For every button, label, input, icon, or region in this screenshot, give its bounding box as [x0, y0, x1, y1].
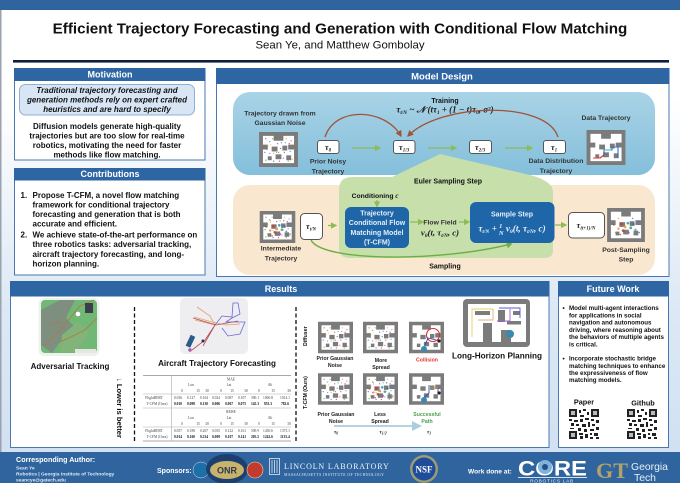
node tau t+1: τ — [577, 220, 580, 230]
corresponding author — [16, 455, 115, 483]
t-cfm model box: (T-CFM) — [364, 240, 390, 246]
sponsors label: Sponsors: — [157, 468, 192, 475]
logo: lincoln laboratory: LINCOLN LABORATORY — [284, 462, 390, 471]
logo: onr: ONR — [217, 466, 238, 476]
diffuser step 1 — [318, 322, 353, 353]
node tau 2/3: 2/3 — [478, 148, 486, 154]
contributions list: aircraft trajectory forecasting, and long- — [32, 250, 184, 259]
flow field label: t/N — [441, 233, 448, 239]
post-sampling label — [602, 247, 650, 264]
motivation callout: heuristics and are hard to specify — [43, 105, 171, 114]
tau labels — [334, 430, 431, 436]
data trajectory image — [587, 130, 625, 165]
results table — [143, 376, 291, 441]
label prior gaussian noise: Prior Gaussian — [317, 356, 353, 362]
results table: 0.127 — [187, 396, 195, 400]
contributions heading — [14, 168, 206, 180]
results table: 0.035 — [212, 429, 220, 433]
sample step box: t/N — [482, 229, 490, 235]
tau labels: 0 — [336, 432, 338, 436]
label more spread — [372, 358, 390, 371]
motivation body text — [29, 122, 185, 160]
results table: 0.160 — [187, 435, 195, 439]
results table: 0.036 — [174, 396, 182, 400]
future work bullets: Incorporate stochastic bridge — [569, 356, 657, 362]
results table: 0.067 — [225, 402, 233, 406]
panel: contributions — [14, 168, 206, 275]
future work bullets: for applications in social — [569, 312, 642, 320]
node tau 2/3: τ — [475, 142, 479, 152]
model design heading — [216, 68, 670, 84]
results table: 15 — [196, 422, 200, 426]
contributions list: three robotics tasks: adversarial tracking, — [32, 240, 191, 249]
contributions list: 1. — [20, 191, 27, 200]
tau labels: 1 — [429, 432, 431, 436]
results table: T-CFM (Ours) — [147, 402, 168, 406]
motivation heading — [14, 68, 206, 81]
sample step box: t/N — [527, 229, 535, 235]
node tau t/N: t/N — [310, 228, 316, 232]
sampling region — [233, 185, 655, 275]
t-cfm model box: Matching Model — [351, 230, 403, 237]
sample step box: N — [498, 230, 504, 237]
tau labels: τ — [427, 430, 429, 436]
label prior gaussian noise row 2: Noise — [329, 419, 343, 425]
training label — [396, 98, 494, 116]
label successful path: Successful — [413, 412, 441, 418]
future work bullets: driving, where reasoning about — [569, 327, 661, 334]
label less spread: Less — [374, 412, 386, 418]
data distribution label: Data Distribution — [529, 158, 583, 165]
training label: 2 — [487, 106, 491, 112]
flow field label: Flow Field — [423, 220, 457, 226]
node tau t+1 — [568, 212, 604, 238]
label successful path — [413, 412, 441, 425]
gaussian noise label — [244, 110, 316, 127]
results table: Lon — [188, 383, 194, 387]
results table: 30 — [287, 389, 291, 393]
training label: + (1 − t)τ — [440, 104, 477, 114]
results table: 0.075 — [238, 402, 246, 406]
conditioning label: Conditioning c — [352, 193, 398, 200]
results table: 0.161 — [238, 429, 246, 433]
results table: 1135.4 — [280, 435, 290, 439]
label less spread — [371, 412, 389, 425]
sample step box: 1 — [499, 223, 502, 230]
euler sampling step region — [339, 154, 553, 258]
node tau 2/3 — [470, 140, 492, 154]
results table: 30 — [244, 389, 248, 393]
qr code github — [627, 409, 657, 439]
euler sampling step label: Euler Sampling Step — [414, 178, 482, 186]
logo: nsf: NSF — [415, 464, 433, 474]
future work heading: Future Work — [587, 284, 640, 294]
results table: 0 — [258, 389, 260, 393]
results table: T-CFM (Ours) — [147, 435, 168, 439]
sample step box — [470, 202, 554, 243]
future work bullets: the behaviors of multiple agents — [569, 334, 664, 341]
results table: 0.098 — [187, 402, 195, 406]
results table: Alt — [268, 383, 272, 387]
label collision: Collision — [416, 358, 438, 364]
results table: Lat — [227, 383, 231, 387]
results table: 0.141 — [238, 435, 246, 439]
logo: georgia tech — [596, 458, 668, 483]
results table: 1430.6 — [263, 429, 273, 433]
results table: 0.006 — [212, 402, 220, 406]
contributions list: framework for conditional trajectory — [32, 200, 170, 210]
intermediate label: Intermediate — [261, 246, 301, 252]
sampling label: Sampling — [429, 264, 461, 270]
results table: 0.010 — [174, 402, 182, 406]
node tau t+1: (t+1)/N — [580, 226, 596, 232]
model design heading: Model Design — [411, 72, 473, 82]
node tau 0: 0 — [329, 148, 332, 154]
results table: 15 — [230, 389, 234, 393]
tau labels: τ — [334, 430, 336, 436]
node tau t/N — [300, 214, 322, 240]
results table: 853.3 — [264, 402, 272, 406]
motivation callout: Traditional trajectory forecasting and — [36, 86, 179, 95]
logo: lincoln laboratory — [270, 458, 390, 477]
tau labels: τ — [379, 430, 382, 436]
results table: 15 — [271, 422, 275, 426]
flow field label: θ — [425, 233, 428, 239]
brown arrows — [325, 110, 558, 137]
motivation body text: robotics, motivating the need for faster — [33, 141, 181, 150]
prior noisy label: Trajectory — [312, 168, 344, 176]
t-cfm step 2 — [363, 373, 398, 405]
flow field label: v — [421, 228, 425, 238]
logo: nsf — [410, 455, 438, 483]
logo: georgia tech: GT — [596, 458, 628, 483]
contributions list: Propose T-CFM, a novel flow matching — [32, 191, 179, 200]
post-sampling label: Step — [619, 256, 633, 264]
future work heading — [558, 281, 669, 296]
results table: 0.267 — [200, 429, 208, 433]
results table: 0.057 — [174, 429, 182, 433]
results table: 15 — [271, 389, 275, 393]
footer — [0, 452, 680, 483]
contributions heading: Contributions — [80, 169, 140, 179]
results table: 30 — [244, 422, 248, 426]
flow field label — [421, 220, 459, 239]
contributions list — [20, 191, 197, 268]
results table: 0.014 — [174, 435, 182, 439]
sample step box: (t, τ — [513, 224, 528, 234]
intermediate label: Trajectory — [265, 256, 297, 262]
row label t-cfm: T-CFM (Ours) — [303, 376, 309, 409]
sample step box: + — [489, 224, 499, 234]
adversarial tracking map — [38, 298, 100, 356]
logo: georgia tech: Georgia — [631, 462, 668, 473]
results table: 0 — [220, 389, 222, 393]
title: Efficient Trajectory Forecasting and Generation with Conditional Flow Matching — [53, 20, 627, 38]
results table: 0.024 — [212, 396, 220, 400]
results table: FlightBERT — [145, 429, 164, 433]
lower is better label: ↓ Lower is better — [115, 378, 124, 438]
tau labels: 1/2 — [382, 432, 387, 436]
long-horizon planning maze — [463, 299, 530, 347]
future work bullets — [562, 305, 666, 384]
results table: 30 — [205, 389, 209, 393]
results table: 1242.6 — [263, 435, 273, 439]
sampling curve arrow — [311, 240, 511, 257]
corresponding author: Corresponding Author: — [16, 455, 95, 464]
contributions list: 2. — [20, 230, 27, 240]
motivation callout: generation methods rely on expert crafted — [26, 96, 188, 104]
green arrows: training — [352, 147, 532, 149]
training label: τ — [396, 104, 400, 114]
results table: RMSE — [226, 410, 237, 414]
results table: 1060.8 — [263, 396, 273, 400]
node tau 1/3: τ — [399, 142, 403, 152]
future work bullets: • — [562, 305, 565, 312]
adversarial tracking label: Adversarial Tracking — [31, 362, 109, 371]
results table: 0 — [258, 422, 260, 426]
label prior gaussian noise row 2: Prior Gaussian — [318, 412, 354, 418]
motivation body text: trajectories but are too slow for real-time — [29, 132, 185, 140]
contributions list: horizon planning. — [32, 260, 99, 268]
data distribution label: Trajectory — [540, 168, 572, 175]
training label: Training — [431, 98, 459, 105]
prior noisy label — [310, 158, 346, 176]
row label diffuser: Diffuser — [303, 326, 309, 346]
node tau 1/3 — [394, 140, 415, 154]
corresponding author: Sean Ye — [16, 466, 35, 472]
future work bullets: the expressiveness of flow — [569, 370, 648, 377]
future work bullets: • — [562, 356, 565, 362]
motivation callout — [20, 84, 194, 115]
results table: 15 — [196, 389, 200, 393]
results table: 30 — [205, 422, 209, 426]
label prior gaussian noise — [317, 356, 353, 369]
results table: 782.6 — [281, 402, 289, 406]
panel: results — [10, 281, 550, 448]
top banner — [0, 0, 680, 10]
motivation body text: Diffusion models generate high-quality — [33, 122, 182, 131]
post-sampling label: Post-Sampling — [602, 247, 650, 254]
results table: MAE — [227, 378, 236, 382]
results table: 390.1 — [251, 396, 259, 400]
motivation heading: Motivation — [88, 70, 132, 80]
results table: 0 — [220, 422, 222, 426]
t-cfm step 3 successful — [409, 373, 444, 405]
github label: Github — [631, 398, 655, 408]
results table: 0.130 — [200, 402, 208, 406]
green arrows: sampling — [328, 200, 566, 226]
node tau 0 — [318, 140, 339, 154]
intermediate trajectory image — [260, 211, 295, 243]
node tau 1 — [544, 140, 566, 154]
training region — [233, 92, 655, 175]
noise trajectory image — [259, 132, 298, 167]
future work bullets: Model multi-agent interactions — [569, 305, 659, 312]
aircraft trajectory label: Aircraft Trajectory Forecasting — [158, 359, 276, 368]
results table: 30 — [287, 422, 291, 426]
work done at label: Work done at: — [468, 468, 512, 476]
contributions list: We achieve state-of-the-art performance on — [32, 230, 197, 240]
results table: 205.5 — [251, 435, 259, 439]
results table: 0.107 — [238, 396, 246, 400]
long-horizon planning label: Long-Horizon Planning — [452, 352, 542, 360]
results table: Alt — [268, 416, 272, 420]
label less spread: Spread — [371, 419, 389, 425]
t-cfm step 1 — [318, 373, 353, 405]
prior noisy label: Prior Noisy — [310, 158, 346, 166]
results table: 0 — [181, 389, 183, 393]
flow field label: , c) — [447, 228, 459, 238]
future work bullets: matching techniques to enhance — [569, 363, 666, 370]
diffuser step 2 — [363, 322, 398, 353]
results table: 145.3 — [251, 402, 259, 406]
sample step box: τ — [478, 224, 482, 234]
paper label: Paper — [574, 398, 594, 406]
node tau 1/3: 1/3 — [403, 148, 410, 154]
logo: lincoln laboratory: MASSACHUSETTS INSTITUTE OF TECHNOLOGY — [284, 473, 384, 477]
sample step box: Sample Step — [491, 212, 533, 218]
motivation body text: methods like flow matching. — [53, 150, 161, 160]
results table: Lon — [188, 416, 194, 420]
data distribution label — [529, 158, 583, 175]
future work bullets: matching models. — [569, 377, 622, 384]
label prior gaussian noise row 2 — [318, 412, 354, 425]
results table: 0 — [181, 422, 183, 426]
panel: motivation — [14, 68, 206, 160]
label more spread: More — [375, 358, 387, 364]
training label: ~ 𝒩 (tτ — [407, 104, 438, 114]
diffuser step 3 collision — [409, 322, 444, 353]
logo: core robotics lab: CORE — [518, 458, 587, 480]
post-sampling image — [607, 208, 645, 242]
contributions list: accurate and efficient. — [32, 220, 117, 228]
contributions list: forecasting and generation that is both — [32, 210, 181, 219]
training label: t/N — [400, 110, 407, 116]
training label: , σ — [478, 104, 489, 114]
results table: 15 — [230, 422, 234, 426]
node tau 0: τ — [325, 142, 329, 152]
results table: 509.9 — [251, 429, 259, 433]
results table: 0.234 — [200, 435, 208, 439]
training label: 0 — [476, 110, 479, 116]
results table: 0.009 — [212, 435, 220, 439]
t-cfm model box: Conditional Flow — [349, 220, 406, 227]
sample step box: v — [504, 224, 511, 234]
node tau 1: 1 — [555, 148, 557, 154]
results table: 0.164 — [200, 396, 208, 400]
results table: 1014.1 — [280, 396, 290, 400]
gaussian noise label: Gaussian Noise — [254, 120, 306, 127]
panel: future work — [558, 281, 669, 448]
sample step box: θ — [510, 229, 513, 235]
data trajectory label: Data Trajectory — [581, 115, 631, 122]
results table: 0.188 — [187, 429, 195, 433]
gaussian noise label: Trajectory drawn from — [244, 110, 316, 118]
results table: 0.087 — [225, 396, 233, 400]
training label: ) — [490, 104, 494, 114]
sample step box: , c) — [533, 224, 546, 234]
t-cfm model box: Trajectory — [360, 210, 394, 218]
results table: 0.107 — [225, 435, 233, 439]
future work bullets: is critical. — [569, 342, 598, 348]
training label: 1 — [437, 110, 440, 116]
label more spread: Spread — [372, 365, 390, 371]
results table: 0.122 — [225, 429, 233, 433]
results heading: Results — [265, 284, 297, 294]
authors: Sean Ye, and Matthew Gombolay — [255, 40, 425, 52]
future work bullets: navigation and autonomous — [569, 320, 652, 326]
node tau 1: τ — [551, 142, 555, 152]
t-cfm model box — [345, 207, 409, 248]
corresponding author: Robotics | Georgia Institute of Technology — [16, 472, 115, 478]
results heading — [10, 281, 550, 296]
label prior gaussian noise: Noise — [328, 363, 342, 369]
node tau t/N: τ — [306, 221, 310, 231]
intermediate label — [261, 246, 301, 262]
results table: 1375.1 — [280, 429, 290, 433]
label successful path: Path — [421, 419, 433, 425]
panel: model design — [216, 68, 670, 276]
aircraft trajectory map — [180, 298, 248, 354]
flow field label: (t, τ — [428, 228, 442, 238]
results table: Lat — [227, 416, 231, 420]
time arrow — [334, 425, 420, 427]
qr code paper — [569, 409, 599, 439]
results table: FlightBERT — [145, 396, 164, 400]
logo: onr — [193, 454, 263, 483]
